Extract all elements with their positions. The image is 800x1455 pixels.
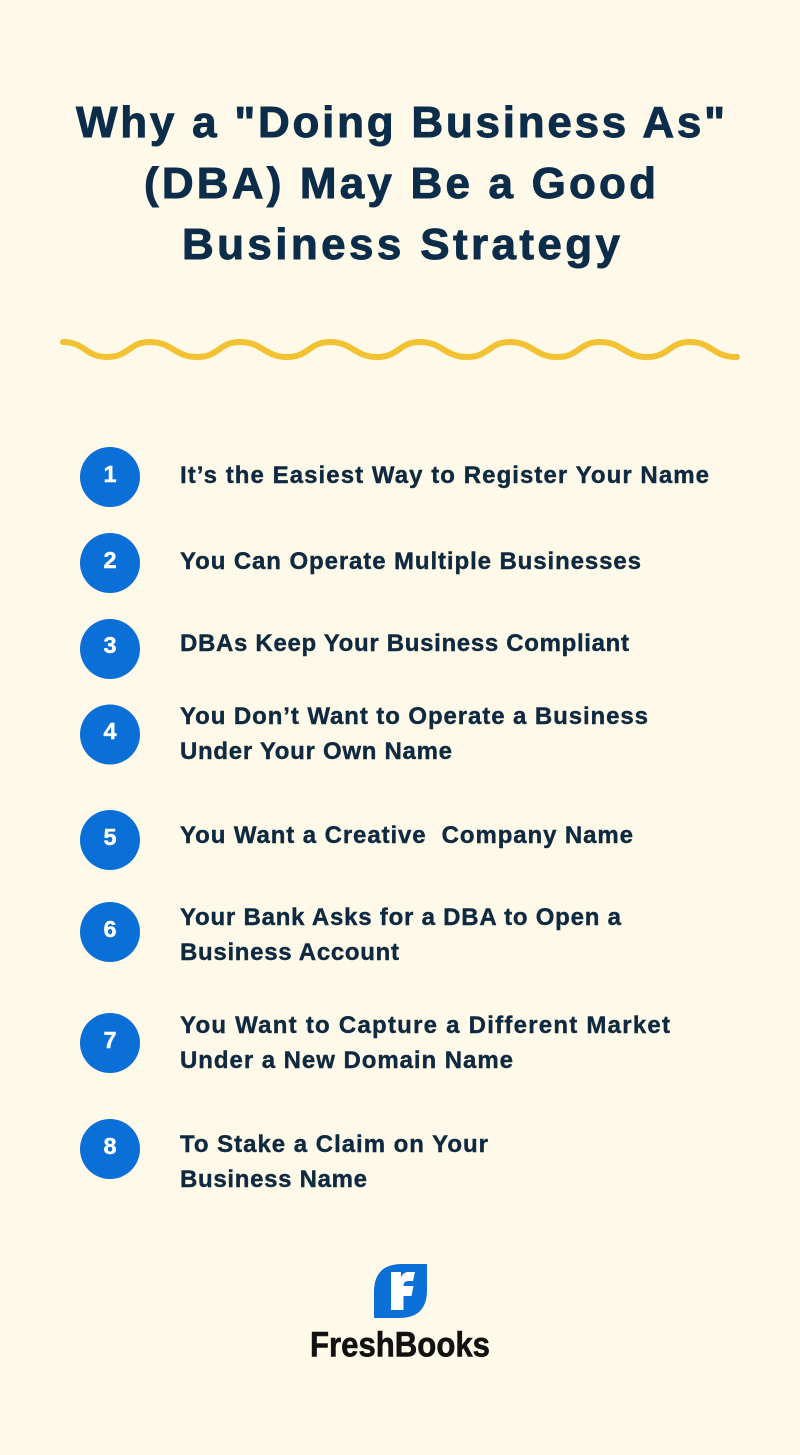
list item 6: Your Bank Asks for a DBA to Open a — [180, 904, 622, 931]
list item 3 — [80, 619, 629, 679]
list item 6: 6 — [103, 916, 117, 942]
list item 3: 3 — [103, 632, 117, 658]
list item 4: You Don’t Want to Operate a Business — [180, 703, 648, 730]
list item 7: You Want to Capture a Different Market — [180, 1012, 670, 1039]
list item 1: It’s the Easiest Way to Register Your Name — [180, 462, 709, 489]
list item 7: Under a New Domain Name — [180, 1047, 513, 1074]
list item 5: You Want a Creative Company Name — [180, 822, 633, 849]
title: Business Strategy — [182, 220, 621, 269]
list item 1 — [80, 447, 709, 507]
list item 2 — [80, 533, 641, 593]
list item 6: Business Account — [180, 939, 399, 966]
list item 5: 5 — [103, 824, 117, 850]
list item 7: 7 — [103, 1027, 117, 1053]
list item 8: 8 — [103, 1133, 117, 1159]
list item 8: Business Name — [180, 1166, 367, 1193]
list item 8: To Stake a Claim on Your — [180, 1131, 488, 1158]
title: (DBA) May Be a Good — [144, 159, 656, 208]
list item 3: DBAs Keep Your Business Compliant — [180, 630, 629, 657]
list item 1: 1 — [103, 461, 117, 487]
list item 2: You Can Operate Multiple Businesses — [180, 548, 641, 575]
icon: FreshBooks leaf — [374, 1264, 427, 1318]
wavy divider — [63, 342, 737, 357]
list item 8 — [80, 1119, 488, 1193]
FreshBooks logo — [310, 1264, 490, 1364]
FreshBooks logo: FreshBooks — [310, 1326, 490, 1364]
title: Why a "Doing Business As" — [76, 98, 725, 147]
list item 4: Under Your Own Name — [180, 738, 452, 765]
list item 2: 2 — [103, 547, 117, 573]
list item 4 — [80, 703, 648, 765]
list item 6 — [80, 902, 622, 966]
list item 4: 4 — [103, 718, 117, 744]
title — [76, 98, 725, 269]
list item 5 — [80, 810, 633, 870]
list item 7 — [80, 1012, 670, 1074]
